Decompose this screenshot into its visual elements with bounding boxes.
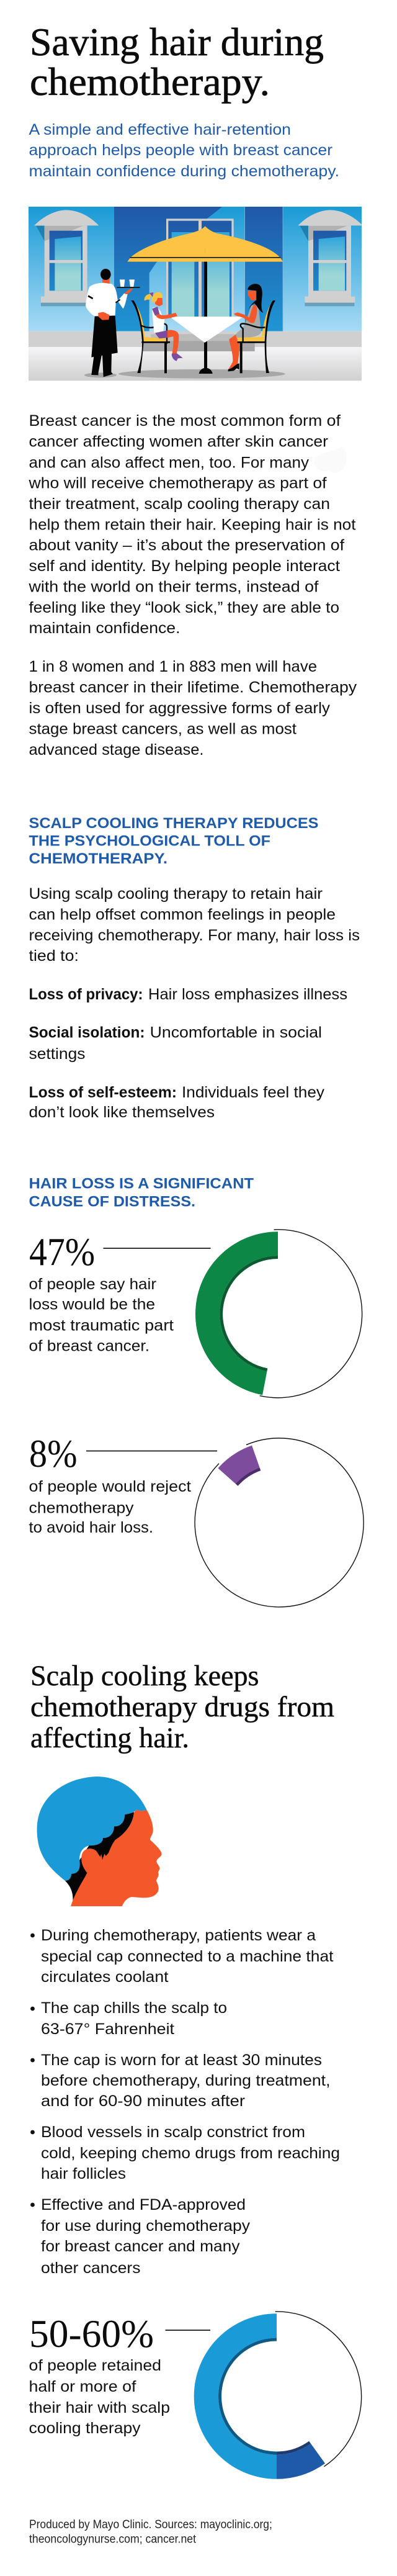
intro paragraph: maintain confidence. [29,619,180,637]
bullet: blood vessels: hair follicles [41,2165,126,2182]
intro paragraph [28,412,356,637]
item: social isolation [29,1024,322,1063]
subtitle: A simple and effective hair-retention [29,121,291,138]
heading: scalp cooling [30,1660,334,1754]
intro paragraph: with the world on their terms, instead of [28,578,319,595]
left window [34,210,99,306]
stat: 50-60% [29,2312,210,2437]
stat: 47%: of breast cancer. [29,1338,149,1355]
item: social isolation: Uncomfortable in social [150,1024,322,1042]
stat: 8%: chemotherapy [29,1500,134,1517]
right chair [238,300,275,373]
intro paragraph: who will receive chemotherapy as part of [28,474,327,492]
stat: 8% [29,1431,217,1536]
bullet: FDA-approved: Effective and FDA-approved [41,2196,246,2213]
bullet: duration [30,2051,330,2110]
statistics paragraph: 1 in 8 women and 1 in 883 men will have [29,658,317,675]
item: social isolation: Social isolation: [29,1024,145,1042]
stat: 50-60%: of people retained [29,2357,161,2374]
intro paragraph: self and identity. By helping people interact [29,557,340,575]
paragraph: common feelings: receiving chemotherapy. For many, hair loss is [29,927,360,944]
bullet: blood vessels [30,2123,340,2182]
intro paragraph: cancer affecting women after skin cancer [29,433,328,451]
stat: 50-60%: their hair with scalp [29,2399,170,2416]
item: loss of self-esteem: Individuals feel they [182,1084,325,1101]
stat: 8%: to avoid hair loss. [29,1519,153,1536]
item: loss of self-esteem: don’t look like themselves [29,1104,215,1121]
statistics paragraph: is often used for aggressive forms of early [29,700,331,717]
bullet: blood vessels: Blood vessels in scalp constrict from [41,2123,305,2141]
footer credits: theoncologynurse.com; cancer.net [29,2533,197,2546]
heading: psychological toll: CHEMOTHERAPY. [29,850,167,867]
stat: 47% [29,1230,211,1355]
donut chart: 8% [195,1438,364,1607]
bullet: duration: and for 60-90 minutes after [41,2092,245,2110]
heading: cause of distress: HAIR LOSS IS A SIGNIFICANT [29,1176,254,1192]
item: loss of self-esteem: Loss of self-esteem: [29,1084,177,1101]
heading: scalp cooling: chemotherapy drugs from [30,1691,334,1723]
bullet list [30,1927,340,2277]
subtitle [29,121,339,180]
stat: 47%: most traumatic part [29,1317,174,1335]
donut chart: 50-60% [194,2312,362,2479]
item: social isolation: settings [29,1045,86,1063]
heading: scalp cooling: affecting hair. [30,1722,189,1754]
bullet: duration: before chemotherapy, during treatment, [41,2072,330,2089]
subtitle: approach helps people with breast cancer [29,142,332,159]
umbrella and table [127,226,283,374]
woman [228,284,263,371]
bullet: special cap: During chemotherapy, patients wear a [41,1927,316,1944]
heading: psychological toll: THE PSYCHOLOGICAL TOLL OF [29,833,270,849]
door [166,218,234,318]
heading: psychological toll [29,815,319,867]
bullet: blood vessels: cold, keeping chemo drugs from reaching [41,2145,340,2162]
item: loss of privacy [29,986,347,1003]
girl [145,292,183,361]
stat: 50-60%: half or more of [29,2378,136,2395]
intro paragraph: and can also affect men, too. For many [29,454,310,471]
building wall and pavement [29,207,362,381]
paragraph: common feelings: Using scalp cooling therapy to retain hair [29,885,323,903]
statistics paragraph [29,658,357,759]
bullet: temperature: The cap chills the scalp to [41,1999,227,2017]
stat: 8%: of people would reject [29,1478,191,1495]
donut chart: 47% [195,1230,362,1398]
bullet: duration: The cap is worn for at least 30 minutes [41,2051,322,2069]
right window [298,210,363,306]
ground shadows [84,369,285,379]
stat: 50-60%: 50-60% [29,2312,154,2356]
paragraph: common feelings [29,885,360,965]
stat: 8%: 8% [29,1431,77,1475]
footer credits: Produced by Mayo Clinic. Sources: mayoclinic.org; [29,2518,272,2531]
heading: scalp cooling: Scalp cooling keeps [30,1660,259,1692]
intro paragraph: their treatment, scalp cooling therapy can [29,495,330,513]
bullet: temperature: 63-67° Fahrenheit [41,2020,174,2038]
paragraph: common feelings: can help offset common feelings in people [29,906,336,924]
paragraph: common feelings: tied to: [29,947,79,965]
bullet: special cap [30,1927,334,1986]
statistics paragraph: stage breast cancers, as well as most [29,720,297,737]
bullet: special cap: special cap connected to a machine that [41,1948,334,1965]
footer credits [29,2518,272,2546]
bullet: FDA-approved: other cancers [41,2259,140,2277]
bullet: temperature [30,1999,227,2038]
bullet: FDA-approved [30,2196,251,2277]
illustration: cafe scene [29,207,363,381]
left chair [131,300,170,373]
bullet: FDA-approved: for breast cancer and many [41,2238,240,2255]
bullet: special cap: circulates coolant [41,1968,169,1986]
item: loss of self-esteem [29,1084,325,1121]
heading: cause of distress: CAUSE OF DISTRESS. [29,1194,195,1210]
stat: 47%: 47% [29,1230,95,1274]
bullet: FDA-approved: for use during chemotherapy [41,2217,251,2235]
intro paragraph: help them retain their hair. Keeping hair is not [29,516,356,533]
subtitle: maintain confidence during chemotherapy. [29,163,339,180]
intro paragraph: feeling like they “look sick,” they are able to [29,599,339,616]
intro paragraph: about vanity – it’s about the preservation of [29,536,344,554]
stat: 47%: of people say hair [29,1276,156,1293]
faint smudge [314,447,347,473]
item: loss of privacy: Loss of privacy: [29,986,143,1003]
stat: 50-60%: cooling therapy [29,2420,141,2437]
title [30,20,324,104]
icon: head with cooling cap [37,1777,162,1906]
waiter [86,269,140,377]
statistics paragraph: advanced stage disease. [29,741,203,759]
stat: 47%: loss would be the [29,1295,155,1313]
title: Saving hair during [30,20,324,64]
intro paragraph: Breast cancer is the most common form of [29,412,341,430]
item: loss of privacy: Hair loss emphasizes illness [148,986,347,1003]
heading: psychological toll: SCALP COOLING THERAPY REDUCES [29,815,319,832]
statistics paragraph: breast cancer in their lifetime. Chemotherapy [29,678,357,696]
title: chemotherapy. [30,60,270,104]
heading: cause of distress [29,1176,254,1210]
